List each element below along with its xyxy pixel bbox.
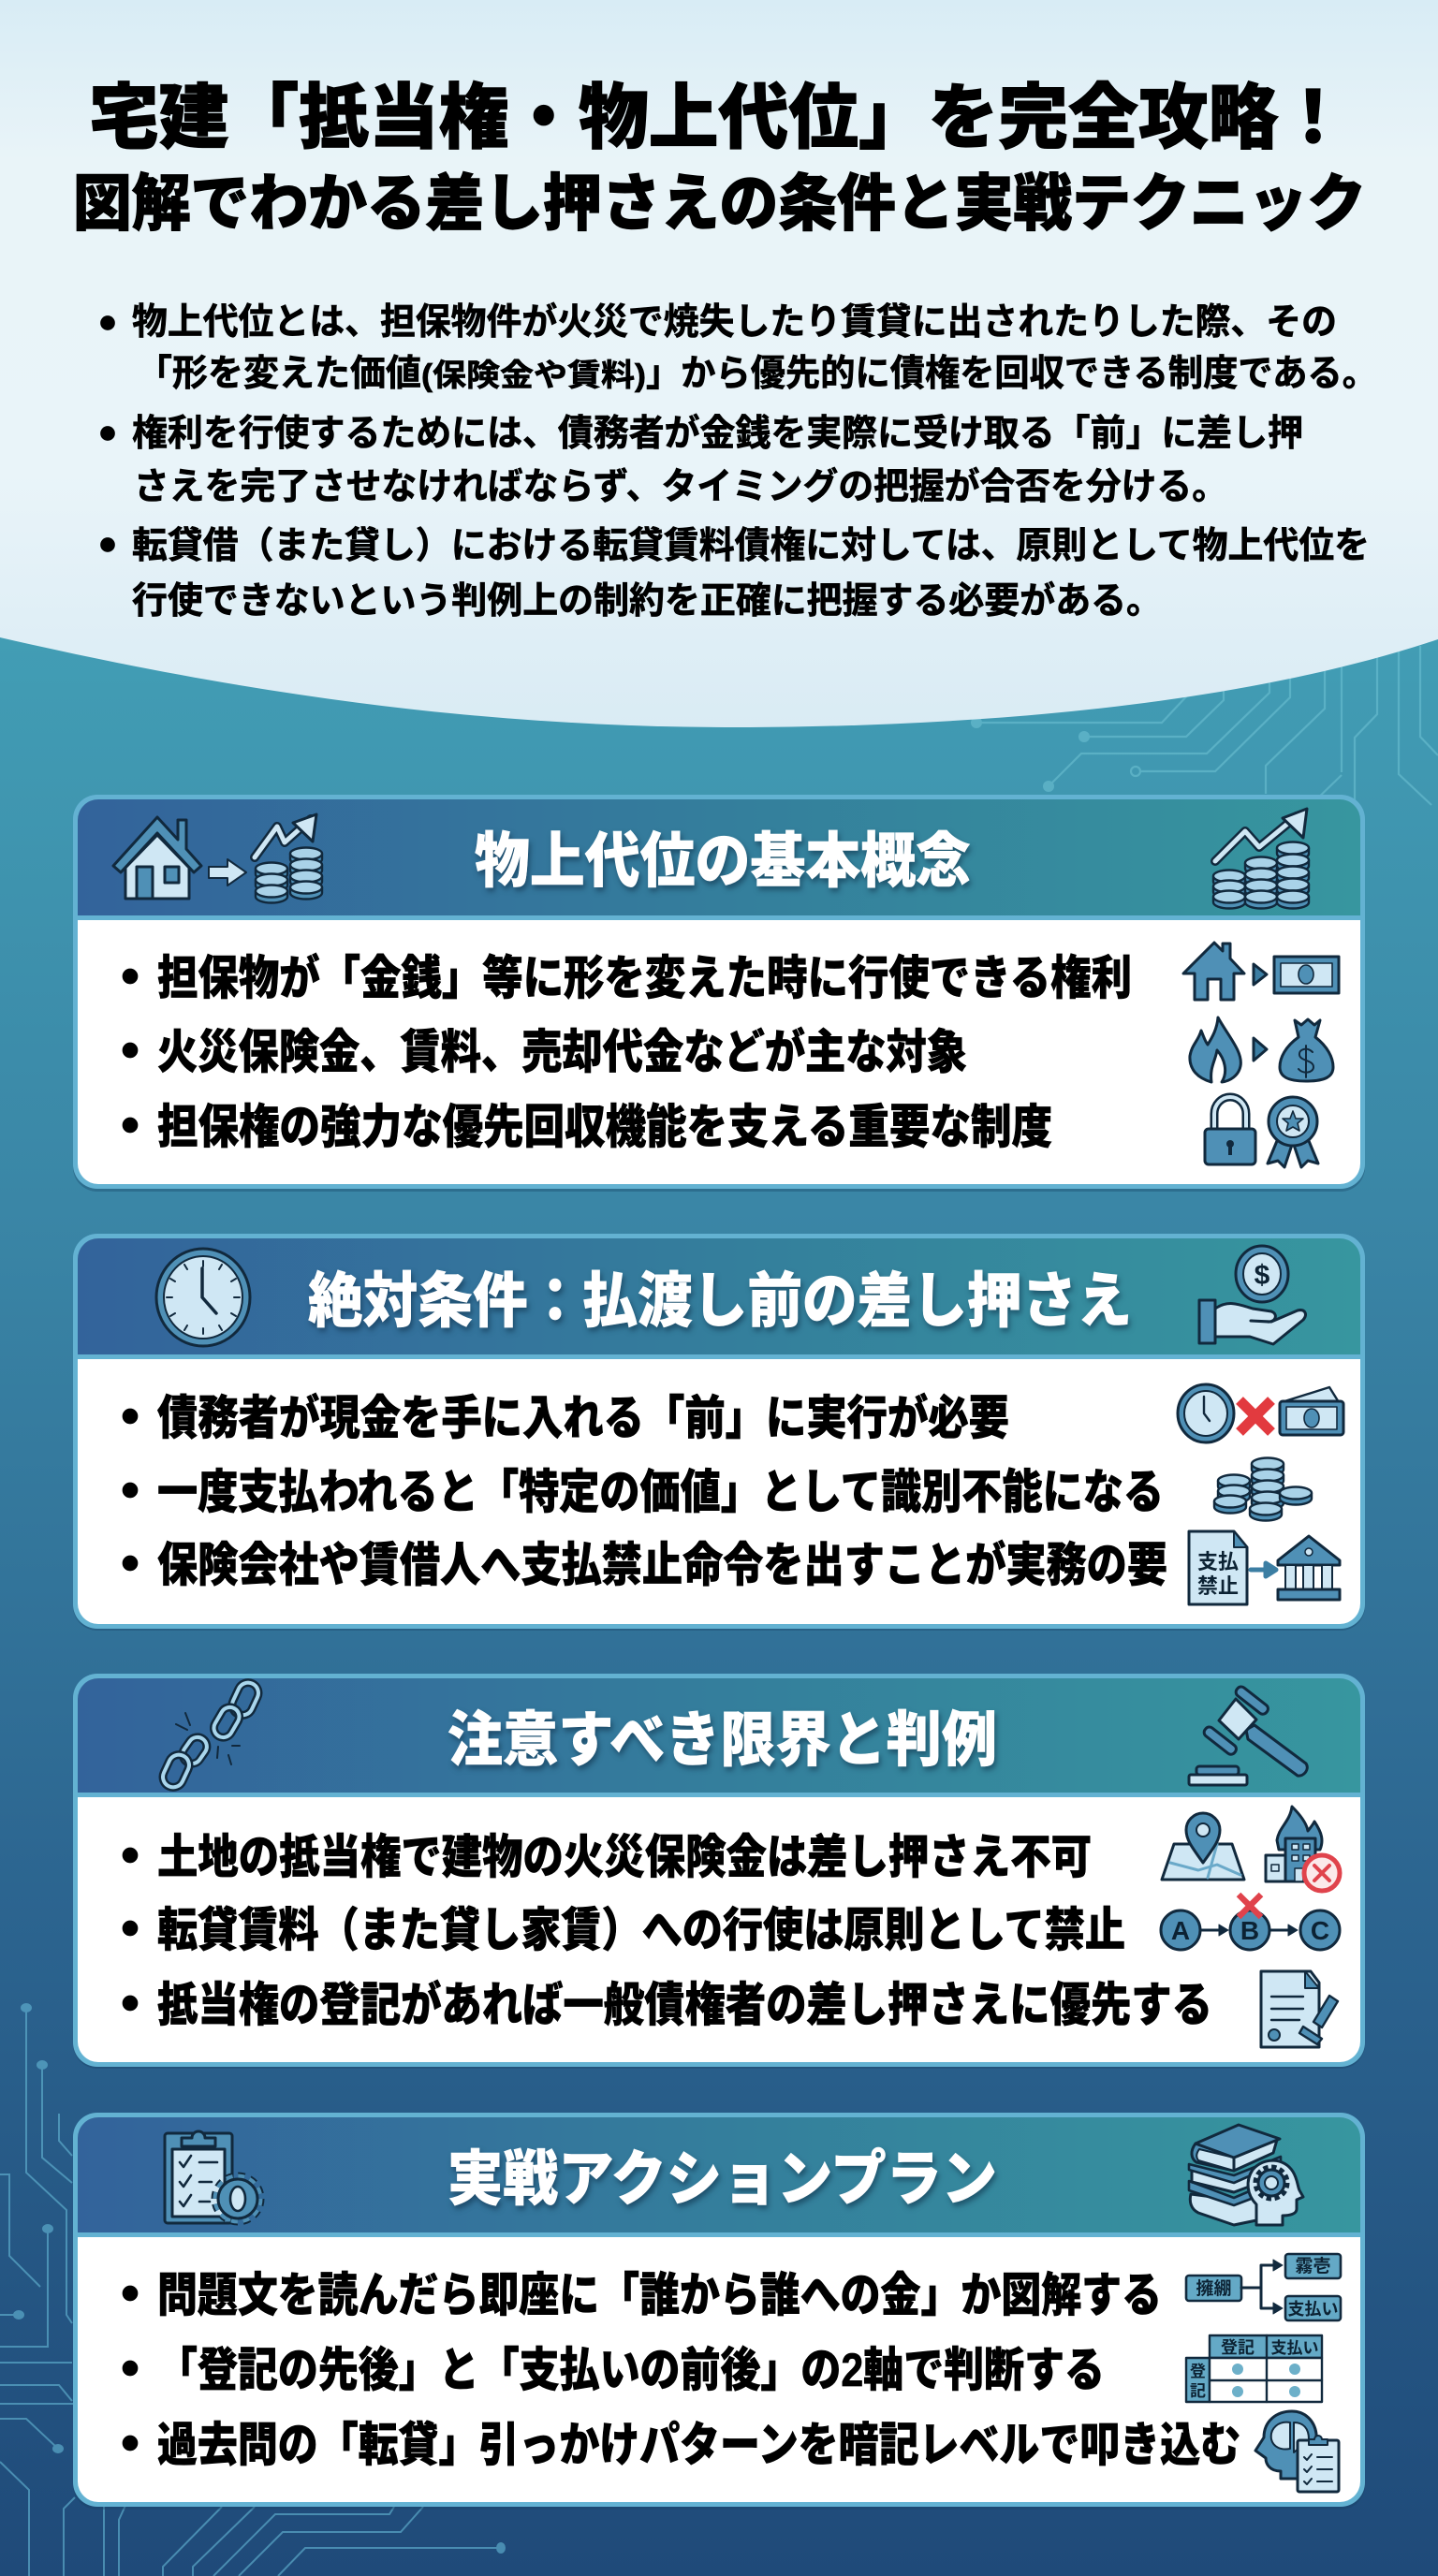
diagram: branching flow: 霧壱 [1295, 2252, 1331, 2277]
bullet row 1: 債務者が現金を手に入れる「前」に実行が必要 [157, 1392, 1009, 1444]
icon: brain head and checklist [1255, 2411, 1339, 2492]
bullet row 3: 保険会社や賃借人へ支払禁止命令を出すことが実務の要 [157, 1539, 1167, 1591]
title [73, 79, 1366, 238]
icon: payment ban document to bank: 支払 [1197, 1545, 1239, 1575]
heading: 絶対条件：払渡し前の差し押さえ [308, 1253, 1132, 1339]
diagram: two axis table: 支払い [1271, 2334, 1318, 2358]
summary bullet list: さえを完了させなければならず、タイミングの把握が合否を分ける。 [134, 467, 1227, 507]
icon: map and burning building [1162, 1807, 1340, 1891]
summary bullet list: 」から優先的に債権を回収できる制度である。 [646, 354, 1377, 394]
heading: 注意すべき限界と判例 [448, 1692, 997, 1778]
icon: chart and coins [1213, 809, 1309, 908]
summary bullet list: 権利を行使するためには、債務者が金銭を実際に受け取る「前」に差し押 [132, 414, 1303, 454]
icon: clock [156, 1249, 250, 1346]
decorative circuit lines: upper right [971, 646, 1438, 805]
icon: A to B to C blocked: B [1240, 1916, 1259, 1945]
icon: house to coins [113, 814, 322, 902]
diagram: two axis table: 記 [1190, 2378, 1206, 2401]
icon: hand with coin [1199, 1246, 1305, 1344]
bullet row 3: 抵当権の登記があれば一般債権者の差し押さえに優先する [157, 1979, 1212, 2031]
top panel with curved edge [0, 0, 1438, 727]
panel: 実戦アクションプラン [73, 2113, 1365, 2510]
summary bullet list: 転貸借（また貸し）における転貸賃料債権に対しては、原則として物上代位を [132, 526, 1370, 566]
bullet row 2: 一度支払われると「特定の価値」として識別不能になる [157, 1466, 1164, 1518]
icon: clock cross money [1178, 1384, 1343, 1442]
bullet row 1: 土地の抵当権で建物の火災保険金は差し押さえ不可 [157, 1831, 1092, 1883]
diagram: two axis table: 登 [1190, 2358, 1206, 2381]
diagram: two axis table: 登記 [1221, 2334, 1255, 2359]
icon: fire to money bag [1190, 1017, 1333, 1082]
icon: A to B to C blocked: A [1171, 1916, 1190, 1945]
panel: 絶対条件 [73, 1234, 1365, 1631]
bullet row 2: 転貸賃料（また貸し家賃）への行使は原則として禁止 [157, 1904, 1125, 1956]
icon: broken chain [159, 1679, 262, 1791]
bullet row 3: 担保権の強力な優先回収機能を支える重要な制度 [157, 1101, 1052, 1153]
icon: clipboard and gear [165, 2131, 260, 2223]
icon: gavel [1189, 1685, 1307, 1785]
panel: 注意すべき限界と判例 [73, 1674, 1365, 2069]
heading: 物上代位の基本概念 [475, 813, 971, 900]
summary bullet list: 行使できないという判例上の制約を正確に把握する必要がある。 [132, 581, 1162, 622]
bullet row 2: 「登記の先後」と「支払いの前後」の2軸で判断する [157, 2344, 1105, 2396]
heading: 実戦アクションプラン [448, 2131, 997, 2217]
diagram: two axis table [1186, 2334, 1322, 2402]
diagram: branching flow [1186, 2252, 1341, 2320]
icon: lock and badge [1205, 1097, 1318, 1167]
bullet row 1: 問題文を読んだら即座に「誰から誰への金」か図解する [157, 2269, 1162, 2321]
icon: house to money [1183, 943, 1339, 1000]
title: 宅建「抵当権・物上代位」を完全攻略！ [89, 79, 1348, 158]
icon: coin pile [1214, 1458, 1312, 1520]
bullet row 1: 担保物が「金銭」等に形を変えた時に行使できる権利 [157, 952, 1132, 1004]
icon: books and head with gear [1189, 2125, 1303, 2225]
decorative circuit lines: lower left [0, 2003, 506, 2576]
title: 図解でわかる差し押さえの条件と実戦テクニック [73, 168, 1366, 238]
summary bullet list: 物上代位とは、担保物件が火災で焼失したり賃貸に出されたりした際、その [132, 302, 1337, 343]
summary bullet list: (保険金や賃料) [421, 358, 646, 392]
bullet row 3: 過去問の「転貸」引っかけパターンを暗記レベルで叩き込む [157, 2419, 1240, 2471]
diagram: branching flow: 擁綳 [1196, 2275, 1232, 2300]
icon: document and stamp [1261, 1971, 1338, 2047]
icon: payment ban document to bank [1189, 1531, 1340, 1604]
icon: A to B to C blocked: C [1311, 1916, 1329, 1945]
icon: A to B to C blocked [1161, 1895, 1340, 1950]
summary bullet list [101, 302, 1377, 622]
diagram: branching flow: 支払い [1288, 2296, 1339, 2320]
icon: hand with coin: $ [1255, 1260, 1270, 1291]
bullet row 2: 火災保険金、賃料、売却代金などが主な対象 [157, 1026, 967, 1078]
summary bullet list: 「形を変えた価値 [137, 354, 421, 394]
panel: 物上代位の基本概念 [73, 795, 1365, 1192]
icon: payment ban document to bank: 禁止 [1197, 1570, 1239, 1600]
